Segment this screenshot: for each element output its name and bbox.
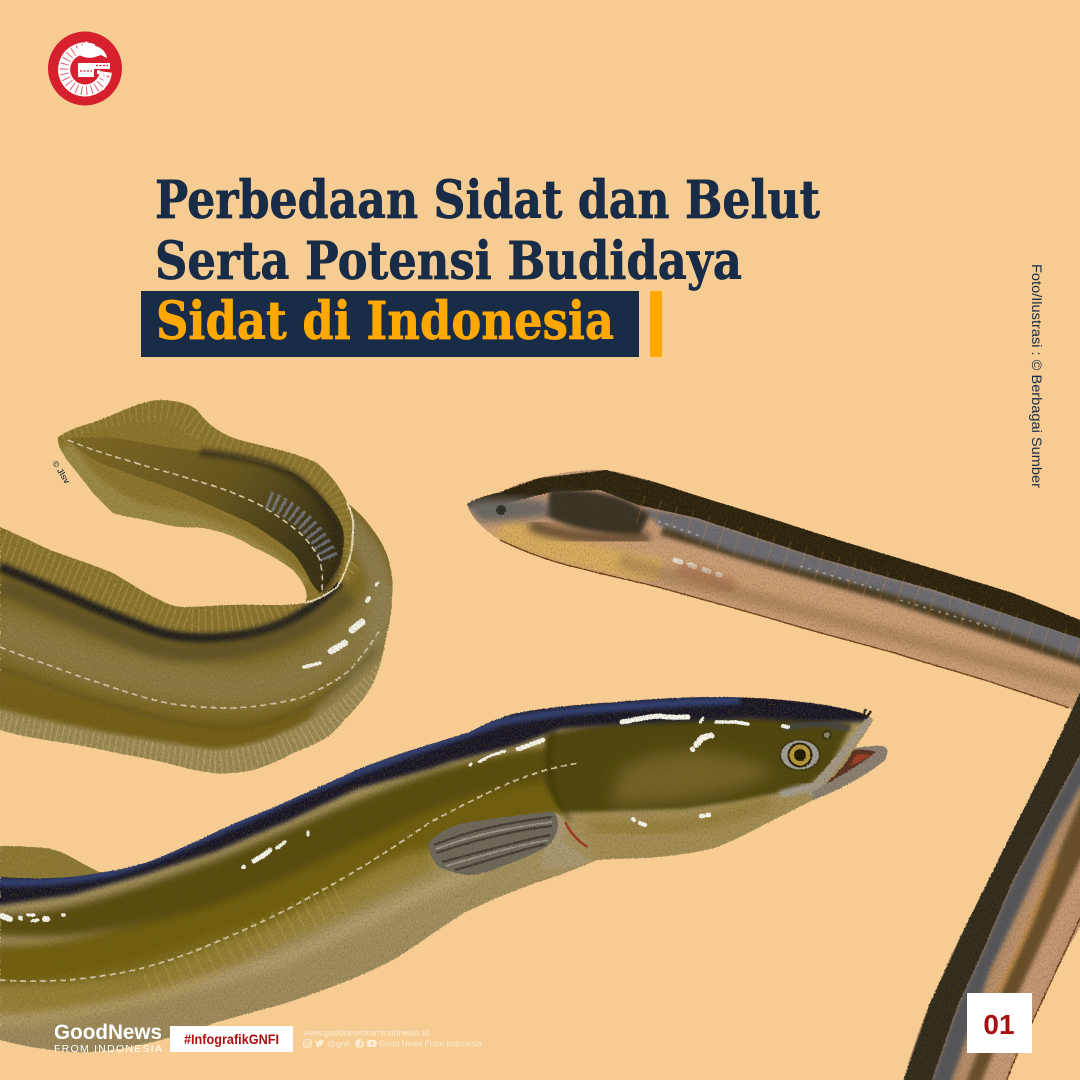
eye <box>779 739 821 771</box>
barbel tip <box>862 709 871 718</box>
logo: GNFI garuda circle <box>48 32 122 106</box>
title highlight: Sidat di Indonesia: Sidat di Indonesia <box>156 291 614 352</box>
sidat body <box>0 690 895 1060</box>
title <box>155 170 820 292</box>
photo credit: Foto/Ilustrasi : © Berbagai Sumber <box>1029 264 1044 489</box>
hashtag tag <box>170 1026 293 1052</box>
title: Serta Potensi Budidaya <box>155 231 742 292</box>
page number <box>967 993 1032 1053</box>
hashtag tag: #InfografikGNFI <box>184 1032 279 1047</box>
highlights on sidat <box>2 716 788 921</box>
illustration: freshwater eel (belut) head and body <box>460 460 1080 1080</box>
pectoral fin <box>429 812 592 875</box>
cream fold edge <box>305 503 353 603</box>
belut upper body <box>460 460 1080 720</box>
title: Perbedaan Sidat dan Belut <box>155 170 820 231</box>
tail lateral line <box>68 440 322 590</box>
jaws and mouth <box>809 716 887 800</box>
highlights on coiled eel <box>304 583 378 667</box>
illustration: coiled eel (sidat) tail <box>0 395 410 790</box>
nostril <box>823 731 831 739</box>
footer brand: GoodNews From Indonesia: FROM INDONESIA <box>54 1043 162 1055</box>
belut lower edge line <box>1007 918 1080 1080</box>
coiled eel tail fin <box>58 400 352 602</box>
belut eye <box>496 505 506 515</box>
small dorsal fin at left <box>0 846 104 885</box>
sidat lateral line <box>0 763 578 981</box>
accent bar <box>650 291 662 357</box>
copyright mark on illustration: © Jlsv <box>50 459 72 486</box>
navy back <box>0 693 875 905</box>
page number: 01 <box>983 1009 1015 1040</box>
illustration: eel (sidat) head and body in foreground <box>0 690 895 1060</box>
head <box>545 718 852 813</box>
footer website and social handles <box>302 1028 482 1048</box>
lateral line of coiled eel <box>0 630 380 708</box>
coiled eel body <box>0 504 393 774</box>
belut lower body segment <box>904 694 1080 1080</box>
footer website and social handles: Good News From Indonesia <box>379 1038 482 1048</box>
footer brand: GoodNews From Indonesia: GoodNews <box>54 1021 162 1044</box>
gill slit <box>565 822 588 847</box>
belut belly line <box>500 540 1069 708</box>
footer brand: GoodNews From Indonesia <box>54 1021 162 1055</box>
footer website and social handles: @gnfi <box>327 1038 350 1048</box>
footer website and social handles: www.goodnewsfromindonesia.id <box>302 1028 429 1038</box>
